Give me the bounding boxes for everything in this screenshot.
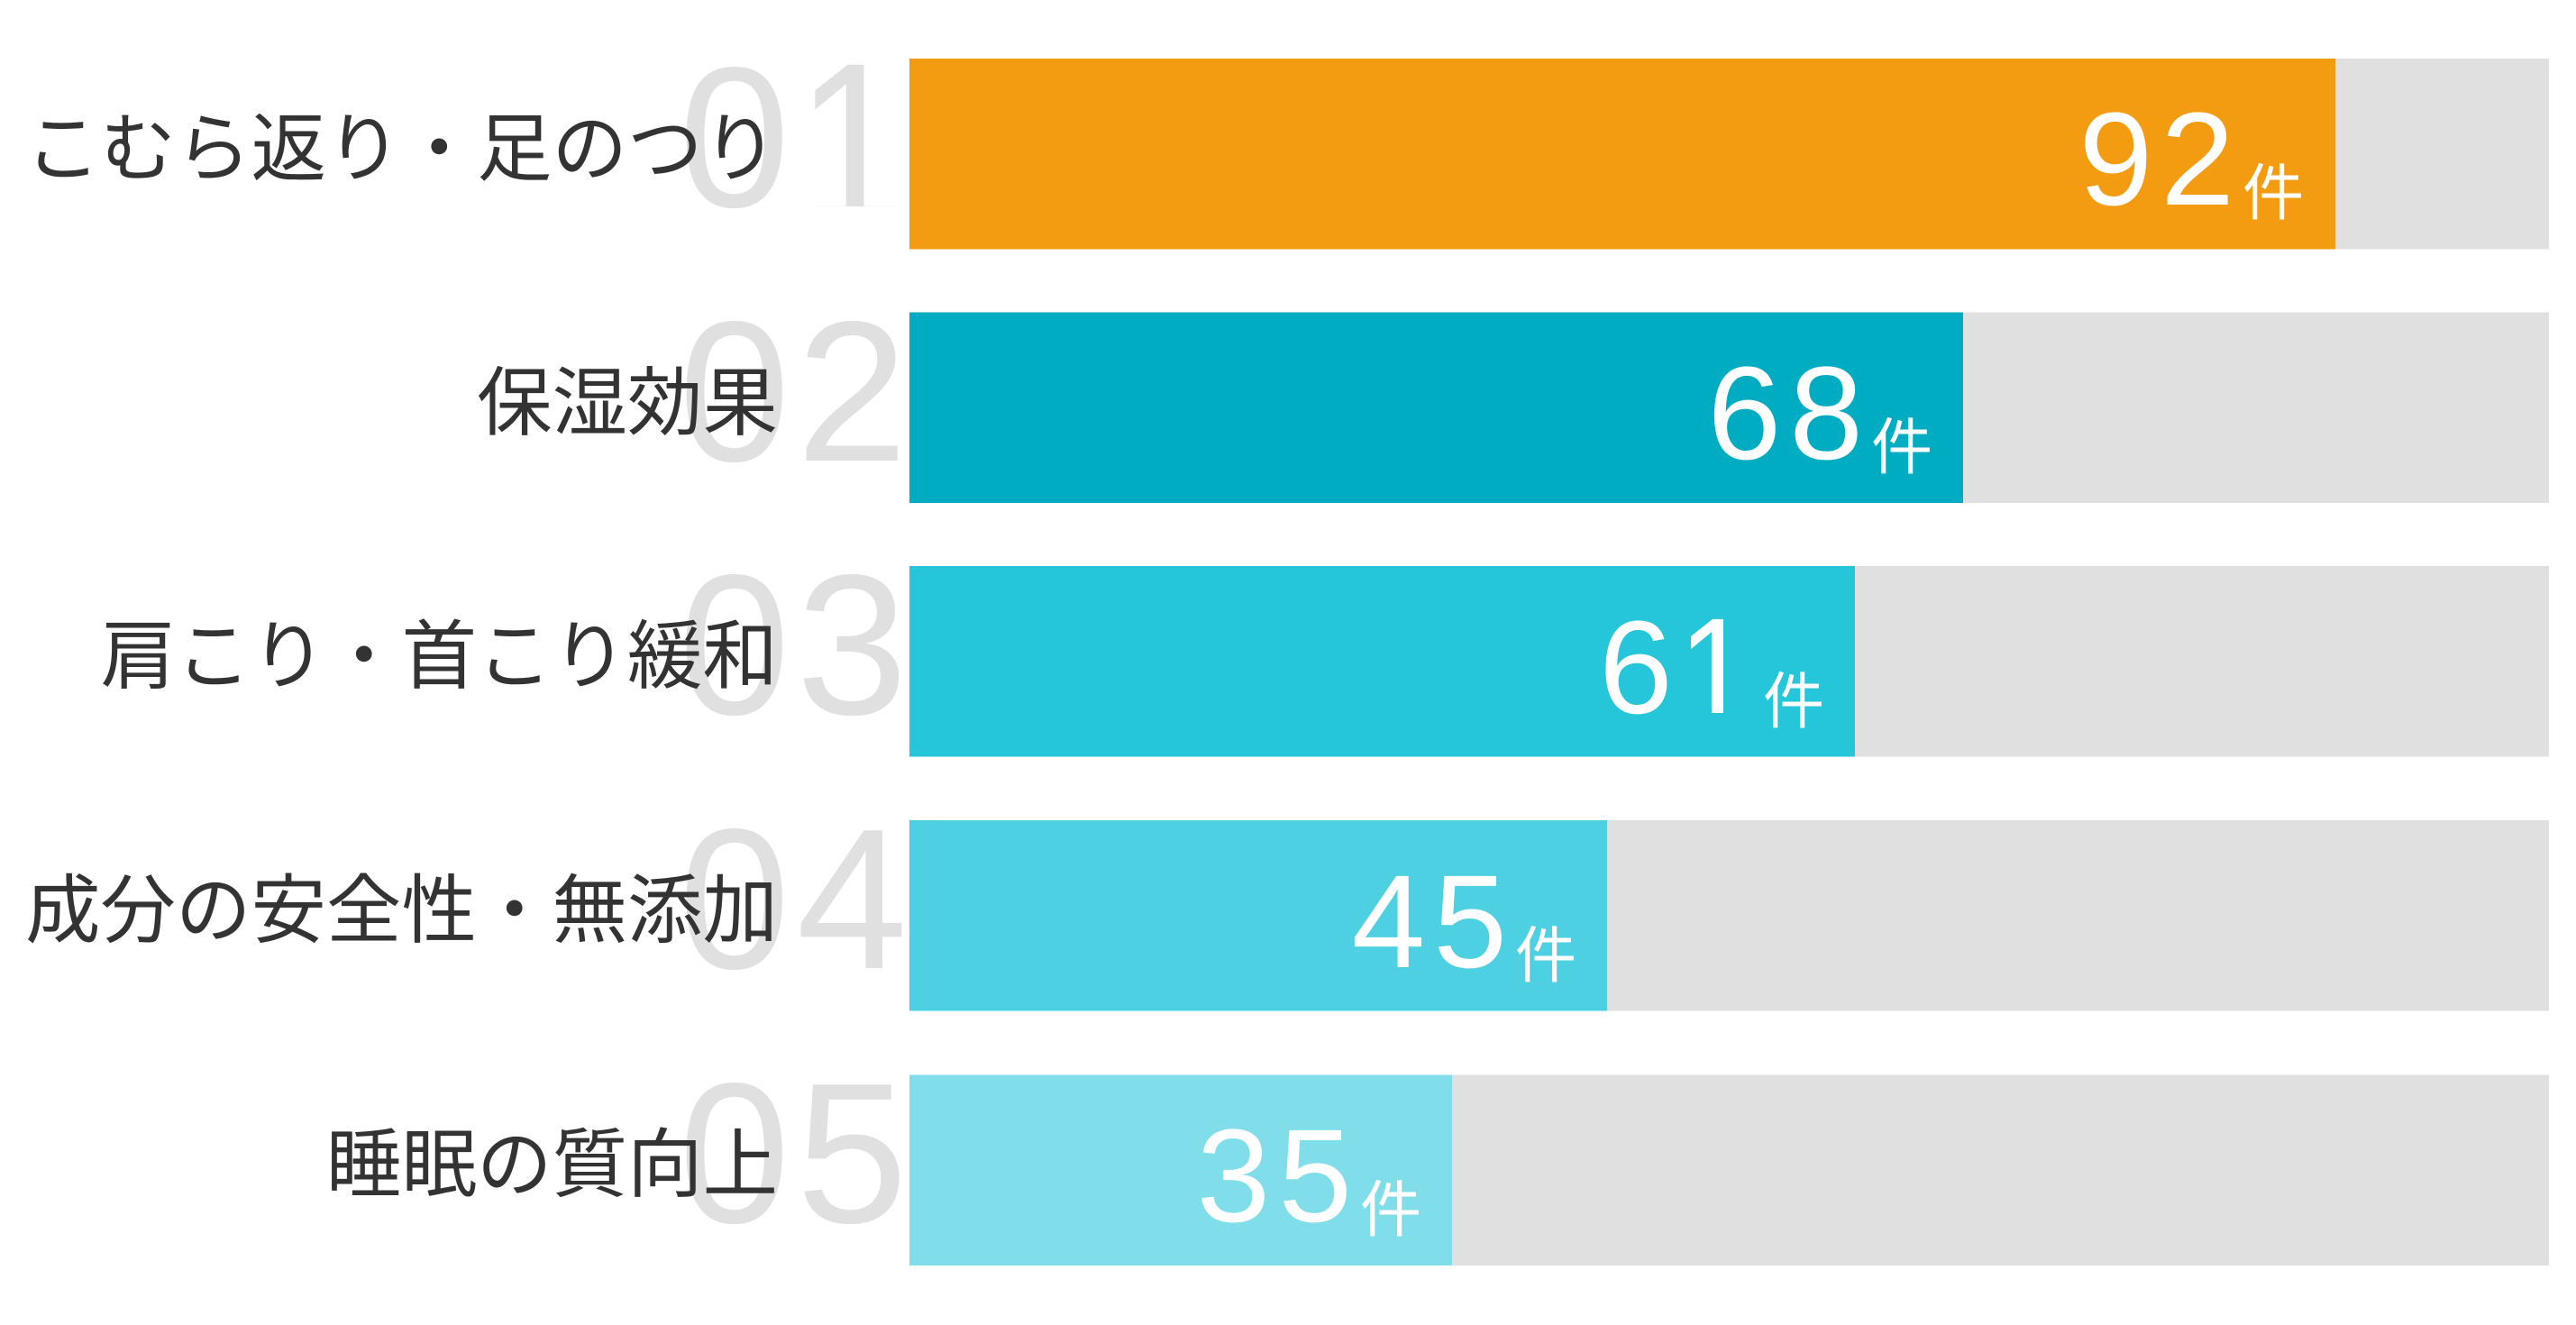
rank number 05: 05 (679, 1042, 914, 1266)
rank number 02: 02 (679, 280, 914, 504)
unit: 件 (2243, 160, 2304, 228)
bar value 45 (909, 820, 1607, 1011)
value 68: 68 (1707, 340, 1871, 488)
row 1: こむら返り・足のつり (38, 59, 2549, 249)
value 92: 92 (2078, 86, 2243, 233)
rank number 01: 1 (796, 14, 913, 273)
value 35: 35 (1196, 1102, 1360, 1250)
row 3: 肩こり・首こり緩和 (103, 566, 2549, 757)
value 61 (1605, 618, 1723, 714)
bar track (909, 1074, 2549, 1266)
rank number 03: 03 (679, 534, 914, 757)
unit: 件 (1763, 668, 1824, 736)
value 61: 6 (1599, 594, 1673, 742)
unit: 件 (1515, 922, 1576, 991)
category label: こむら返り・足のつり (25, 106, 778, 191)
rank number 01 (687, 65, 863, 208)
rank number 01: 0 (679, 26, 796, 250)
rank number 04: 04 (679, 788, 914, 1011)
category label: 肩こり・首こり緩和 (101, 614, 778, 699)
category label: 成分の安全性・無添加 (25, 868, 778, 953)
bar value 92 (909, 59, 2335, 249)
unit: 件 (1360, 1176, 1421, 1245)
bar value 35 (909, 1074, 1452, 1266)
bar track (909, 566, 2549, 757)
row 5: 睡眠の質向上 (326, 1042, 2549, 1266)
value 45: 45 (1351, 848, 1515, 996)
bar track (909, 820, 2549, 1011)
row 2: 保湿効果 (477, 280, 2549, 504)
bar track (909, 59, 2549, 249)
category label: 保湿効果 (477, 361, 778, 445)
value 61: 1 (1678, 586, 1752, 757)
bar value 61 (909, 566, 1855, 757)
category label: 睡眠の質向上 (326, 1122, 778, 1207)
row 4: 成分の安全性・無添加 (25, 788, 2549, 1011)
bar value 68 (909, 312, 1963, 503)
bar track (909, 312, 2549, 503)
unit: 件 (1871, 414, 1932, 482)
